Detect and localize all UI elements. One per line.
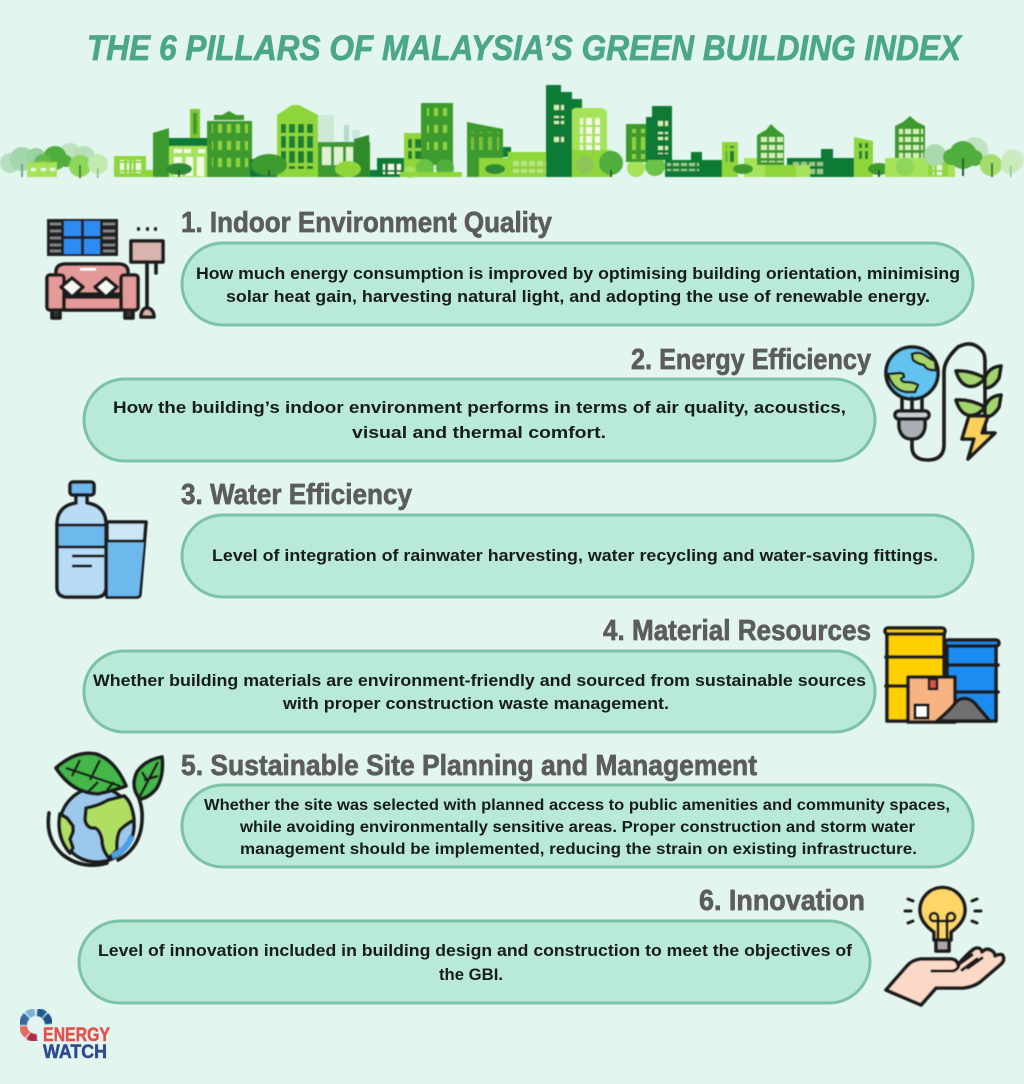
section 4: material resources — [84, 615, 875, 732]
text 4: Whether building materials are environment-friendly and sourced from sustainable sources — [93, 672, 866, 690]
text 6: Level of innovation included in building design and construction to meet the objectives of — [98, 942, 853, 960]
logo mark: segmented ring — [23, 1012, 49, 1038]
icon: living room sofa, window and lamp — [47, 219, 163, 318]
text 3: Level of integration of rainwater harvesting, water recycling and water-saving fittings. — [212, 547, 938, 565]
text 5: while avoiding environmentally sensitive areas. Proper construction and storm water — [239, 819, 915, 836]
text 4: with proper construction waste management. — [282, 695, 669, 713]
text 5: Whether the site was selected with planned access to public amenities and community spaces, — [204, 797, 950, 814]
buildings centre right — [546, 85, 955, 177]
text 2: visual and thermal comfort. — [352, 424, 606, 442]
illustration: green city skyline — [0, 85, 1024, 178]
icon: hand holding light bulb — [886, 888, 1004, 1005]
logo: Energy Watch — [23, 1012, 110, 1063]
logo text: ENERGY — [43, 1025, 110, 1046]
text 2: How the building’s indoor environment performs in terms of air quality, acoustics, — [113, 399, 846, 417]
trees left — [0, 143, 108, 178]
icon: earth with leaves — [48, 753, 162, 865]
pill 2 — [84, 379, 875, 461]
section 6: innovation — [79, 885, 870, 1003]
icon: drums, box and rubble pile — [885, 628, 999, 722]
heading 3: 3. Water Efficiency — [181, 479, 412, 511]
logo: Energy Watch: WATCH — [43, 1042, 107, 1063]
text 6: the GBI. — [439, 966, 503, 984]
buildings left — [114, 103, 558, 178]
heading 2: 2. Energy Efficiency — [631, 344, 871, 376]
heading 5: 5. Sustainable Site Planning and Management — [181, 750, 757, 782]
section 3: water efficiency — [181, 479, 973, 597]
pill 3 — [182, 515, 973, 597]
text 5: management should be implemented, reducing the strain on existing infrastructure. — [240, 841, 917, 858]
pill 6 — [79, 921, 870, 1003]
section 1: indoor environment quality — [181, 207, 973, 325]
pill 1 — [182, 243, 973, 325]
section 5: sustainable site planning and management — [181, 750, 973, 867]
heading 6: 6. Innovation — [699, 885, 865, 917]
text 1: How much energy consumption is improved by optimising building orientation, minimising — [196, 265, 960, 283]
pill 5 — [182, 785, 973, 867]
pill 4 — [84, 651, 875, 732]
section 2: energy efficiency — [84, 344, 875, 461]
trees right — [924, 137, 1024, 177]
icon: water bottle and glass — [57, 482, 146, 597]
heading 4: 4. Material Resources — [603, 615, 871, 647]
text 1: solar heat gain, harvesting natural light, and adopting the use of renewable energy. — [226, 288, 930, 306]
heading 1: 1. Indoor Environment Quality — [181, 207, 552, 239]
icon: globe light bulb with plant and lightning — [886, 344, 1001, 460]
